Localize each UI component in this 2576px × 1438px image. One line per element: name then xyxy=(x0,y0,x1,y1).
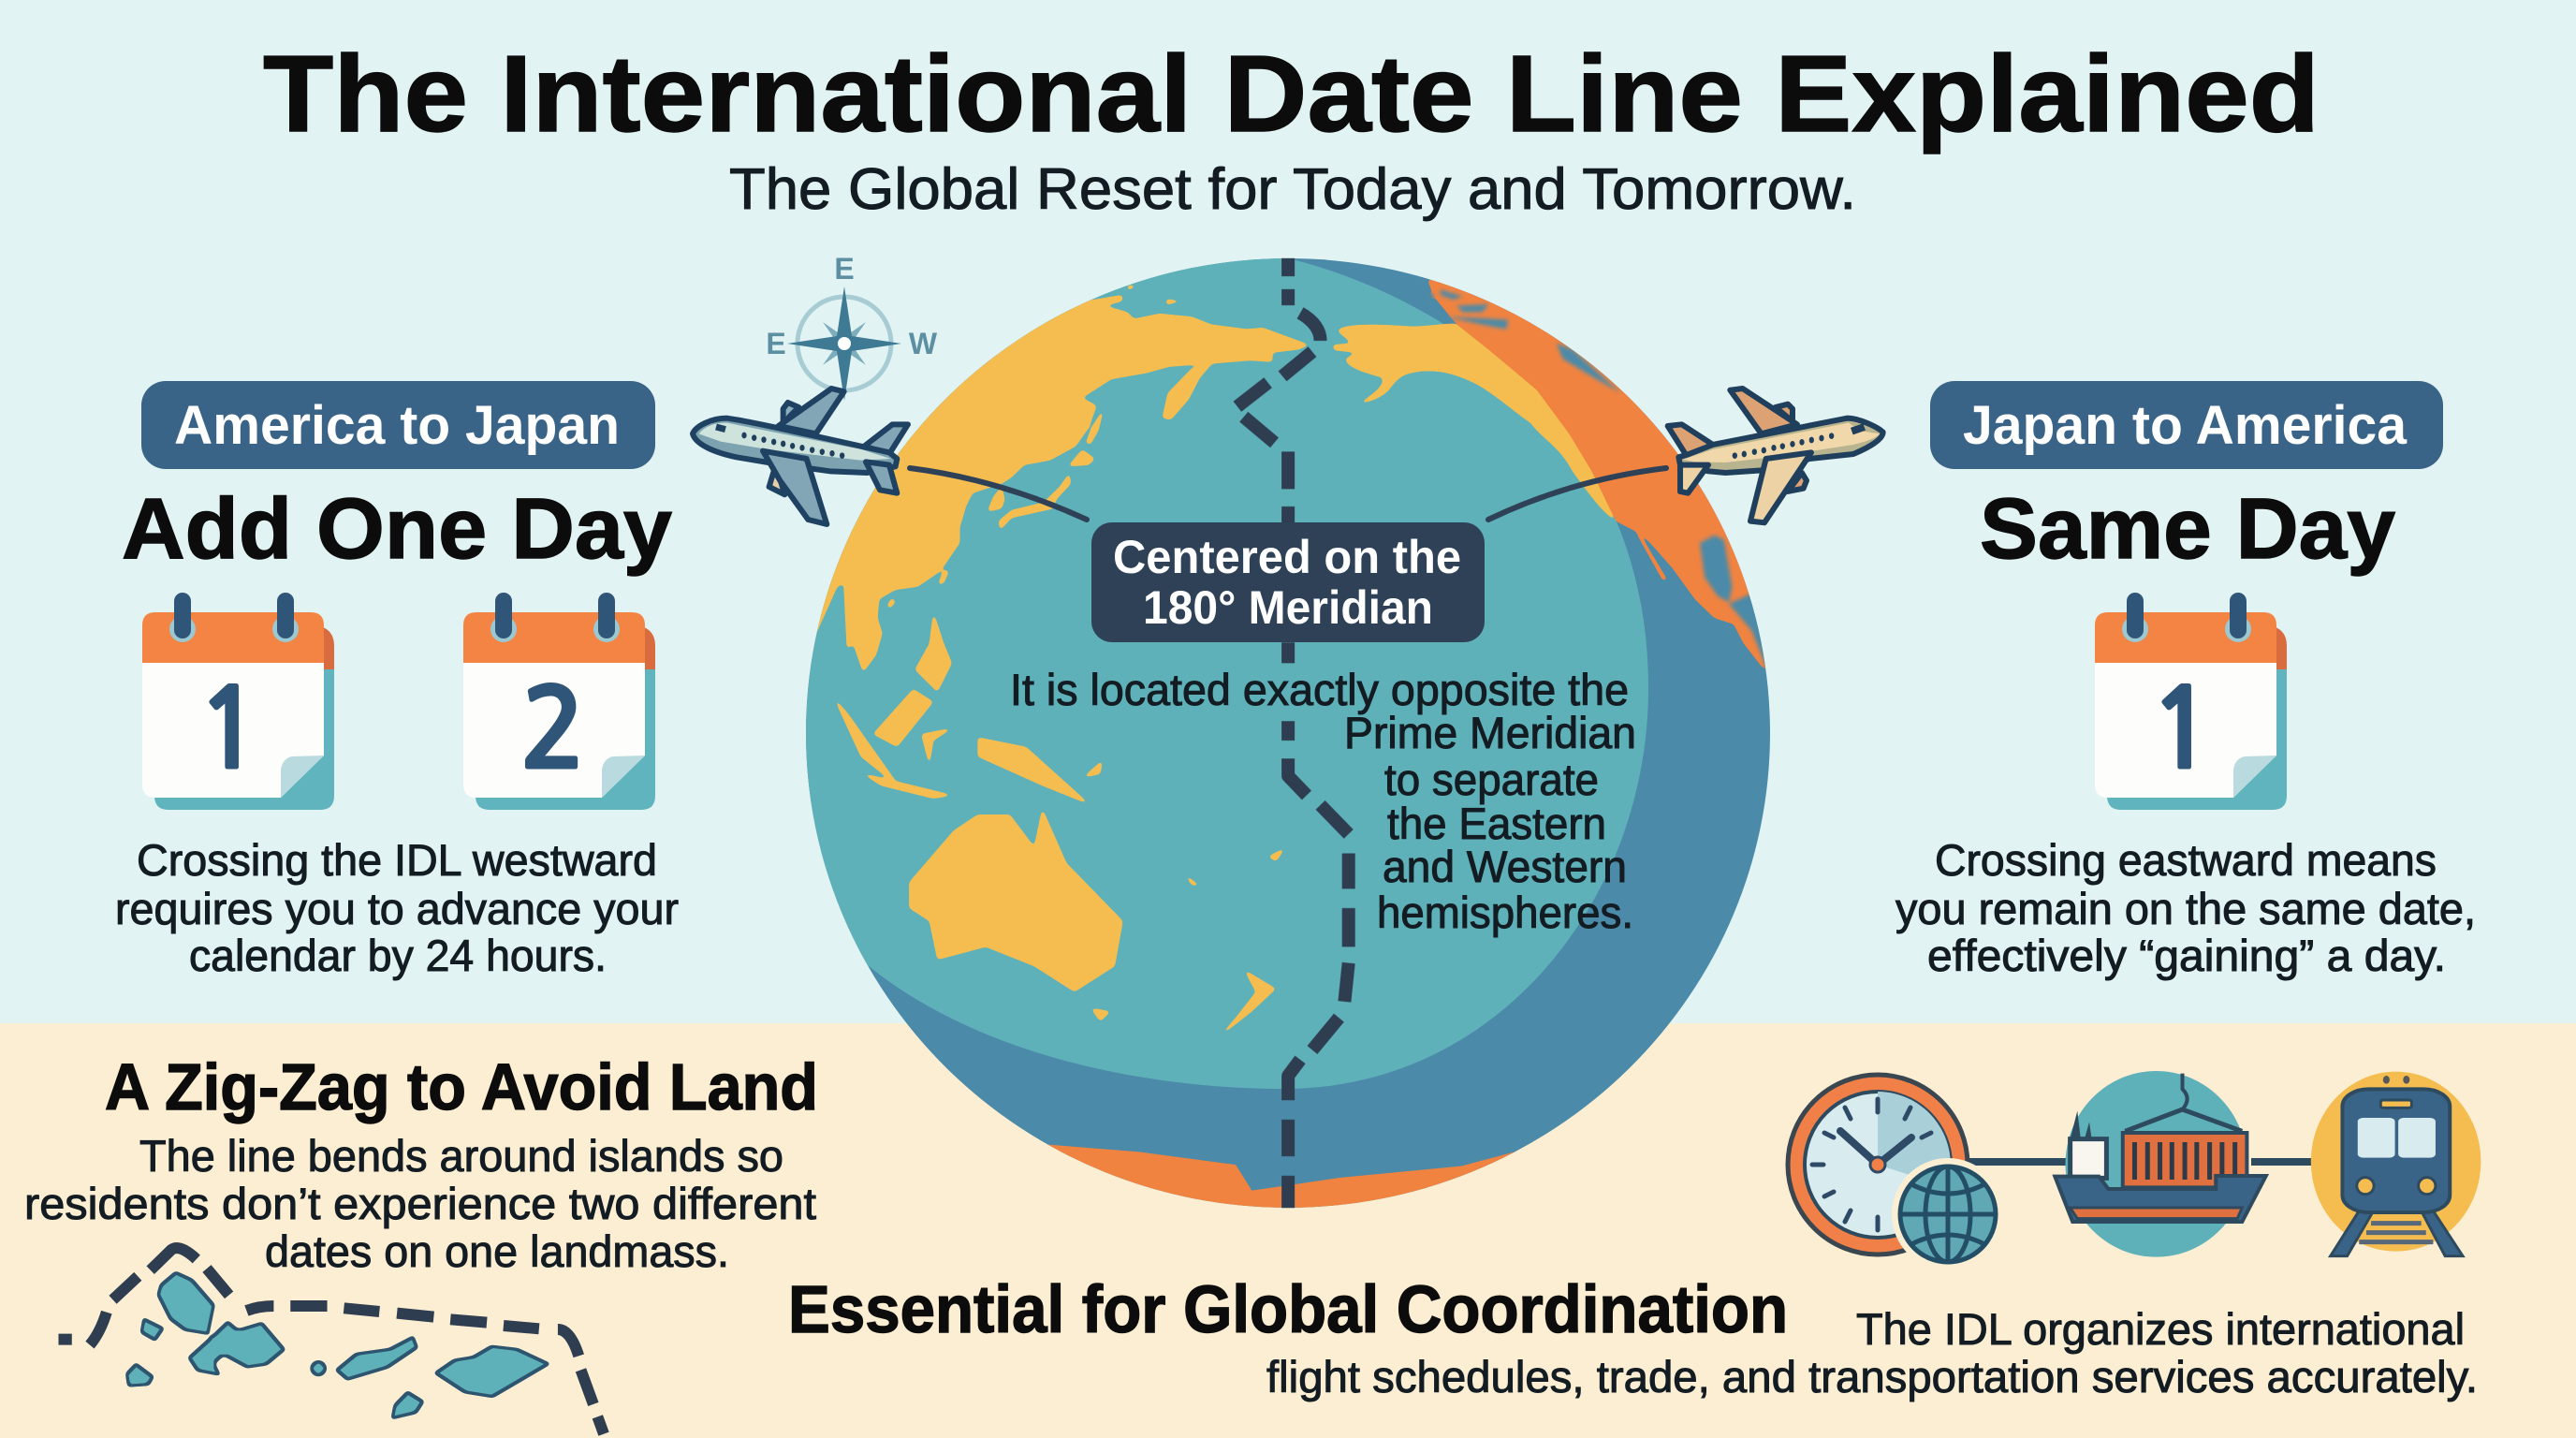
compass letters: W xyxy=(909,327,938,360)
plane: westbound xyxy=(693,389,908,524)
calendar: same day: 1 xyxy=(2148,675,2216,785)
pill: America to Japan xyxy=(141,381,655,469)
pill: Japan to America xyxy=(1930,381,2443,469)
text: zig-zag: residents don’t experience two different xyxy=(24,1179,816,1228)
text: westward: Crossing the IDL westward xyxy=(137,835,657,885)
compass letters: E xyxy=(834,252,855,286)
icon: cargo ship xyxy=(2055,1071,2266,1257)
text: global coordination: flight schedules, trade, and transportation services accurately. xyxy=(1266,1352,2478,1401)
heading: Add One Day: Add One Day xyxy=(122,481,672,577)
land: North America, shaded side xyxy=(1428,279,1765,668)
text: meridian explanation: and Western xyxy=(1383,842,1627,891)
connector lines from planes xyxy=(910,468,1666,520)
background: sand panel xyxy=(0,1023,2576,1438)
panel: global coordination xyxy=(788,1071,2481,1401)
compass letters: E xyxy=(766,327,786,360)
text: meridian explanation: hemispheres. xyxy=(1377,888,1633,937)
land: North America, lit side xyxy=(1332,324,1616,521)
panel: zig-zag xyxy=(24,1050,818,1434)
background: sky panel xyxy=(0,0,2576,1024)
calendar: day 2: 2 xyxy=(520,675,587,785)
connector lines xyxy=(1969,1158,2312,1166)
heading: global coordination: Essential for Global Coordination xyxy=(788,1273,1788,1347)
text: eastward: Crossing eastward means xyxy=(1935,835,2437,885)
text: zig-zag: dates on one landmass. xyxy=(265,1226,729,1276)
text: westward xyxy=(115,835,679,980)
text: global coordination xyxy=(1266,1304,2478,1401)
text: eastward: effectively “gaining” a day. xyxy=(1927,931,2446,980)
callout: 180 meridian xyxy=(1091,522,1485,642)
text: meridian explanation: It is located exactly opposite the xyxy=(1010,665,1629,714)
text: zig-zag xyxy=(24,1131,816,1276)
calendar: day 1 xyxy=(142,593,334,810)
sea patches on North America xyxy=(1424,289,1772,674)
callout: 180 meridian: 180° Meridian xyxy=(1143,581,1433,634)
text: westward: calendar by 24 hours. xyxy=(189,931,607,980)
icon: small globe xyxy=(1892,1158,2004,1270)
panel: Japan to America xyxy=(1895,381,2476,980)
text: global coordination: The IDL organizes international xyxy=(1856,1304,2465,1354)
map: islands and bent line xyxy=(58,1248,604,1434)
text: meridian explanation: to separate xyxy=(1384,755,1599,804)
title: The International Date Line Explained xyxy=(263,33,2320,154)
plane: eastbound xyxy=(1668,389,1883,522)
text: eastward xyxy=(1895,835,2476,980)
land: Asia and Oceania xyxy=(773,284,1616,1040)
text: westward: requires you to advance your xyxy=(115,884,679,933)
calendar: day 1: 1 xyxy=(196,675,263,785)
callout: 180 meridian: Centered on the xyxy=(1113,531,1461,583)
panel: America to Japan xyxy=(115,381,679,980)
text: meridian explanation: the Eastern xyxy=(1387,799,1606,848)
date line dashes xyxy=(1237,258,1349,1208)
pill: Japan to America: Japan to America xyxy=(1963,395,2408,456)
text: zig-zag: The line bends around islands so xyxy=(139,1131,783,1181)
compass letters xyxy=(766,252,938,360)
calendar: same day xyxy=(2095,593,2287,810)
subtitle: The Global Reset for Today and Tomorrow. xyxy=(729,157,1856,222)
compass xyxy=(787,286,901,401)
globe xyxy=(806,258,1770,1208)
icon: clock xyxy=(1788,1075,1968,1255)
pill: America to Japan: America to Japan xyxy=(174,395,620,456)
text: eastward: you remain on the same date, xyxy=(1895,884,2476,933)
text: meridian explanation xyxy=(1010,665,1636,937)
heading: Same Day: Same Day xyxy=(1980,481,2395,577)
globe: lit ocean xyxy=(806,258,1648,1089)
icon: train xyxy=(2311,1072,2481,1256)
heading: zig-zag: A Zig-Zag to Avoid Land xyxy=(105,1050,818,1123)
land: Antarctica xyxy=(1048,1144,1515,1208)
calendar: day 2 xyxy=(463,593,655,810)
text: meridian explanation: Prime Meridian xyxy=(1344,708,1636,757)
